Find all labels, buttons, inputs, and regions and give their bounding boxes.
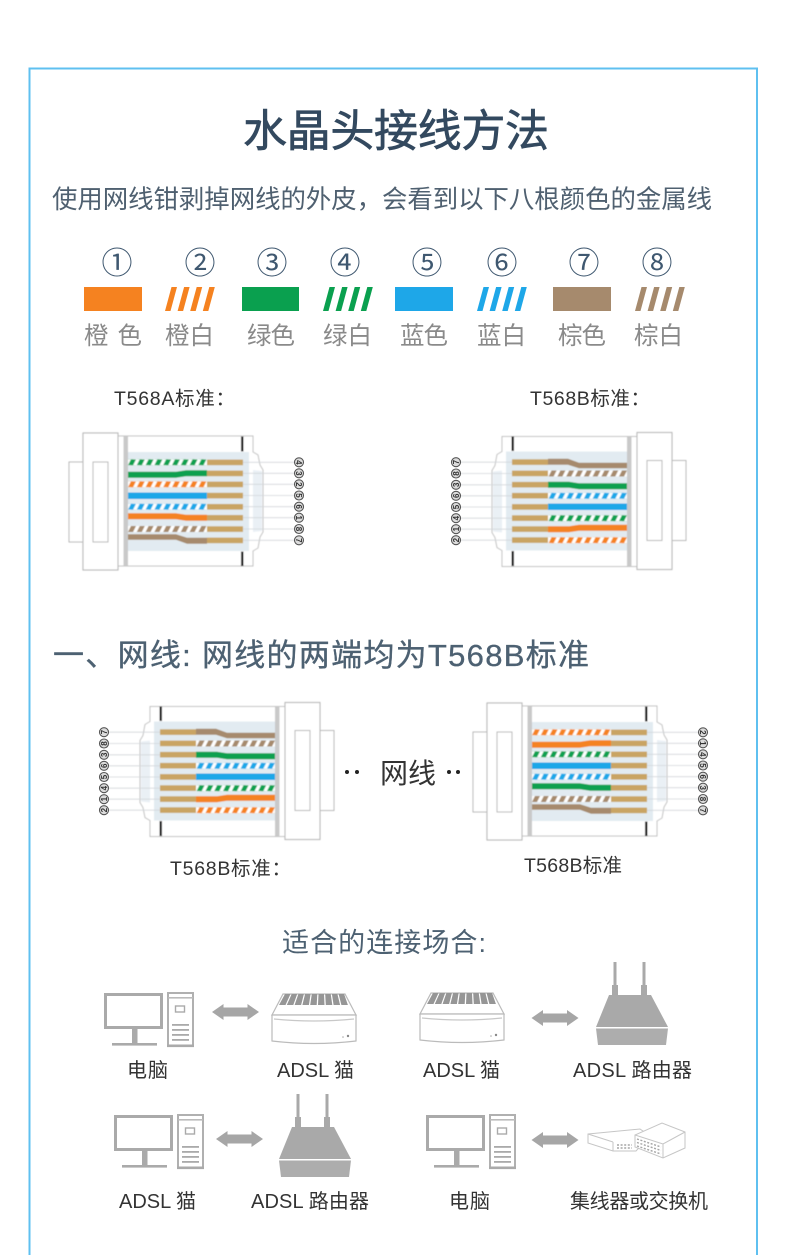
legend item 1: orange: 橙 色 — [84, 322, 142, 350]
connector: left cable end: 8 — [100, 741, 109, 746]
connector: T568B: 2 — [452, 537, 461, 542]
label: ADSL router: ADSL 路由器 — [251, 1190, 369, 1213]
connector: T568B: 4 — [452, 515, 461, 520]
label: ADSL router: ADSL 路由器 — [573, 1059, 692, 1082]
T568A label: T568A标准： — [114, 382, 235, 411]
use case: ADSL modem to router — [420, 962, 692, 1082]
legend item 3: green — [242, 238, 299, 350]
connector: T568B: 6 — [452, 493, 461, 498]
connector: right cable end: 1 — [698, 741, 707, 746]
connector: T568B: 3 — [452, 482, 461, 487]
icon: computer — [428, 1115, 516, 1169]
connector: left cable end: 4 — [100, 785, 109, 790]
legend item 8: brown white: ⑧ — [642, 238, 672, 283]
connector: T568B — [452, 432, 686, 570]
use-cases heading: 适合的连接场合: — [282, 928, 486, 958]
connector: right cable end — [473, 703, 708, 840]
label: hub or switch: 集线器或交换机 — [570, 1190, 708, 1213]
connector: left cable end: 2 — [100, 807, 109, 812]
use case: computer to hub or switch — [428, 1115, 708, 1213]
legend item 4: green white — [323, 238, 373, 350]
legend item 6: blue white: ⑥ — [486, 238, 518, 283]
connector: left cable end: 1 — [100, 796, 109, 801]
connector: T568B: 7 — [452, 459, 461, 464]
connector: right cable end: 7 — [698, 808, 707, 813]
legend item 2: orange white — [165, 238, 216, 350]
connector: right cable end: 2 — [698, 730, 707, 735]
icon: computer — [116, 1115, 204, 1169]
label: computer: 电脑 — [449, 1190, 490, 1213]
label: ADSL modem: ADSL 猫 — [119, 1190, 196, 1213]
legend item 2: orange white: 橙白 — [165, 322, 214, 350]
connector: T568B: 8 — [452, 471, 461, 476]
use case: ADSL modem to router, second row — [116, 1094, 369, 1213]
connector: T568A: 3 — [294, 471, 303, 476]
cable label — [345, 758, 460, 789]
connector: T568A: 2 — [294, 482, 303, 487]
legend item 4: green white: 绿白 — [323, 322, 372, 350]
icon: computer — [106, 993, 194, 1047]
use case: computer to ADSL modem — [106, 993, 356, 1082]
connector: right cable end: 5 — [698, 763, 707, 768]
legend item 5: blue: ⑤ — [412, 238, 442, 283]
icon: ADSL router — [279, 1094, 351, 1177]
connector: left cable end: 5 — [100, 774, 109, 779]
legend item 8: brown white — [634, 238, 685, 350]
legend item 5: blue: 蓝色 — [400, 322, 448, 350]
legend item 3: green: ③ — [256, 238, 288, 283]
title: 水晶头接线方法 — [243, 107, 549, 156]
connector: T568A: 1 — [294, 515, 303, 520]
connector: T568A: 4 — [294, 460, 303, 465]
arrow — [532, 1010, 578, 1026]
wire colour legend — [84, 238, 685, 350]
legend item 6: blue white — [477, 238, 527, 350]
arrow — [216, 1131, 263, 1147]
label: ADSL modem: ADSL 猫 — [277, 1059, 354, 1082]
arrow — [532, 1132, 578, 1148]
T568B label: T568B标准： — [530, 382, 650, 411]
icon: hub and switch — [588, 1123, 685, 1158]
legend item 8: brown white: 棕白 — [634, 322, 683, 350]
label: computer: 电脑 — [127, 1059, 168, 1082]
legend item 7: brown: ⑦ — [568, 238, 600, 283]
legend item 3: green: 绿色 — [247, 322, 295, 350]
connector: left cable end: 3 — [100, 752, 109, 757]
legend item 7: brown: 棕色 — [558, 322, 606, 350]
connector: T568B: 5 — [452, 504, 461, 509]
connector: right cable end: 8 — [698, 797, 707, 802]
legend item 1: orange — [84, 238, 142, 350]
right cable standard label: T568B标准 — [524, 855, 622, 877]
label: ADSL modem: ADSL 猫 — [423, 1059, 500, 1082]
connector: right cable end: 6 — [698, 774, 707, 779]
legend item 7: brown — [553, 238, 611, 350]
legend item 2: orange white: ② — [184, 238, 216, 283]
icon: ADSL modem — [272, 994, 356, 1044]
legend item 1: orange: ① — [102, 238, 132, 283]
connector: right cable end: 4 — [698, 752, 707, 757]
icon: ADSL router — [596, 962, 668, 1045]
connector: left cable end — [100, 702, 334, 840]
connector: left cable end: 6 — [100, 763, 109, 768]
connector: T568A: 8 — [294, 527, 303, 532]
intro text: 使用网线钳剥掉网线的外皮，会看到以下八根颜色的金属线 — [52, 180, 712, 216]
arrow — [212, 1004, 259, 1020]
legend item 6: blue white: 蓝白 — [477, 322, 526, 350]
legend item 4: green white: ④ — [330, 238, 360, 283]
section heading: 一、网线: 网线的两端均为T568B标准 — [53, 638, 589, 673]
connector: left cable end: 7 — [100, 729, 109, 734]
cable label: 网线 — [380, 758, 436, 789]
connector: T568B: 1 — [452, 526, 461, 531]
connector: T568A — [69, 433, 304, 570]
connector: T568A: 6 — [294, 504, 303, 509]
left cable standard label: T568B标准： — [170, 852, 291, 881]
icon: ADSL modem — [420, 993, 504, 1042]
connector: T568A: 7 — [294, 538, 303, 543]
connector: right cable end: 3 — [698, 785, 707, 790]
connector: T568A: 5 — [294, 493, 303, 498]
legend item 5: blue — [395, 238, 453, 350]
